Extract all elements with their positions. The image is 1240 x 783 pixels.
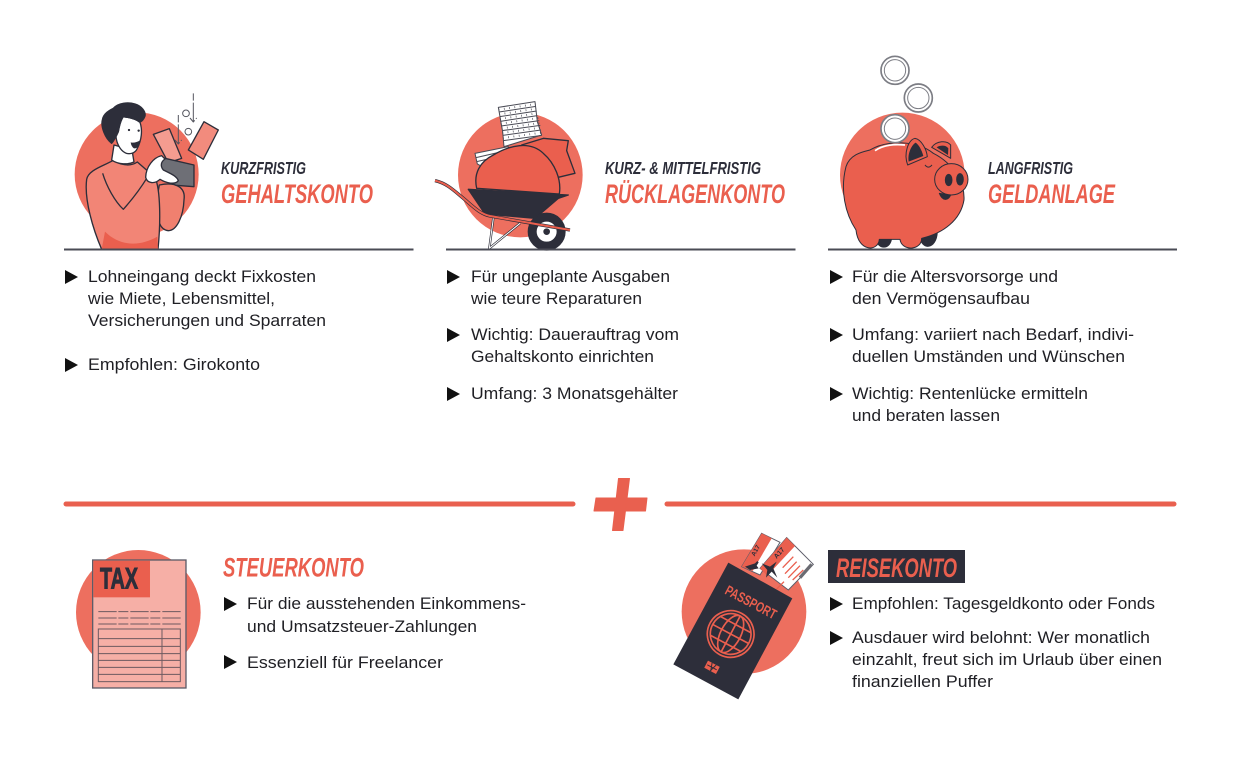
icon: passport with tickets	[673, 533, 813, 699]
icon: passport with tickets: A17	[773, 546, 787, 560]
heading: Reisekonto: REISEKONTO	[836, 553, 957, 583]
label: Kurzfristig: KURZFRISTIG	[221, 158, 306, 178]
text block: Geldanlage bullets: den Vermögensaufbau	[852, 290, 1030, 308]
text block: Gehaltskonto bullets: Lohneingang deckt Fixkosten	[88, 268, 316, 286]
divider line	[828, 248, 1177, 250]
text block: Reisekonto bullets: einzahlt, freut sich im Urlaub über einen	[852, 651, 1162, 669]
text block: Geldanlage bullets	[830, 268, 1134, 425]
icon: tax form	[76, 550, 201, 688]
panel: Gehaltskonto	[64, 93, 414, 374]
icon: tax form: TAX	[100, 562, 138, 595]
heading: Reisekonto	[828, 550, 965, 583]
heading: Steuerkonto: STEUERKONTO	[223, 552, 364, 582]
icon: piggy bank with coins	[840, 56, 968, 248]
text block: Steuerkonto bullets: Essenziell für Freelancer	[247, 654, 444, 672]
text block: Steuerkonto bullets: und Umsatzsteuer-Zahlungen	[247, 618, 477, 636]
text block: Geldanlage bullets: und beraten lassen	[852, 407, 1000, 425]
text block: Geldanlage bullets: duellen Umständen und Wünschen	[852, 348, 1125, 366]
label: Kurz- und mittelfristig: KURZ- & MITTELFRISTIG	[605, 158, 761, 178]
heading: Gehaltskonto: GEHALTSKONTO	[221, 179, 373, 209]
text block: Gehaltskonto bullets	[65, 268, 326, 374]
text block: Geldanlage bullets: Umfang: variiert nach Bedarf, indivi-	[852, 326, 1134, 344]
text block: Rücklagenkonto bullets: Wichtig: Dauerauftrag vom	[471, 326, 679, 344]
text block: Rücklagenkonto bullets	[447, 268, 679, 403]
panel: Geldanlage	[828, 56, 1177, 425]
text block: Reisekonto bullets	[830, 595, 1162, 691]
icon: passport with tickets: PASSPORT	[723, 582, 780, 622]
text block: Reisekonto bullets: finanziellen Puffer	[852, 673, 994, 691]
icon: wheelbarrow with coins and sack	[435, 102, 583, 250]
text block: Gehaltskonto bullets: wie Miete, Lebensmittel,	[87, 290, 275, 308]
icon: passport with tickets: A17	[750, 544, 762, 558]
text block: Reisekonto bullets: Ausdauer wird belohnt: Wer monatlich	[852, 629, 1150, 647]
text block: Rücklagenkonto bullets: Umfang: 3 Monatsgehälter	[471, 385, 679, 403]
heading: Geldanlage: GELDANLAGE	[988, 179, 1116, 209]
text block: Geldanlage bullets: Wichtig: Rentenlücke ermitteln	[852, 385, 1088, 403]
text block: Reisekonto bullets: Empfohlen: Tagesgeldkonto oder Fonds	[852, 595, 1155, 613]
plus separator	[64, 478, 1176, 530]
panel: Reisekonto	[673, 533, 1162, 699]
text block: Gehaltskonto bullets: Versicherungen und Sparraten	[88, 312, 326, 330]
text block: Rücklagenkonto bullets: wie teure Reparaturen	[470, 290, 642, 308]
text block: Gehaltskonto bullets: Empfohlen: Girokonto	[88, 356, 260, 374]
heading: Rücklagenkonto: RÜCKLAGENKONTO	[605, 179, 785, 209]
icon: person with wallet	[75, 93, 218, 249]
text block: Steuerkonto bullets: Für die ausstehenden Einkommens-	[247, 595, 526, 613]
text block: Rücklagenkonto bullets: Für ungeplante Ausgaben	[471, 268, 670, 286]
label: Langfristig: LANGFRISTIG	[988, 158, 1073, 178]
text block: Rücklagenkonto bullets: Gehaltskonto einrichten	[471, 348, 654, 366]
divider line	[64, 248, 414, 250]
divider line	[446, 248, 796, 250]
text block: Steuerkonto bullets	[224, 595, 526, 672]
panel: Steuerkonto	[76, 550, 526, 688]
panel: Rücklagenkonto	[435, 102, 796, 403]
text block: Geldanlage bullets: Für die Altersvorsorge und	[852, 268, 1058, 286]
